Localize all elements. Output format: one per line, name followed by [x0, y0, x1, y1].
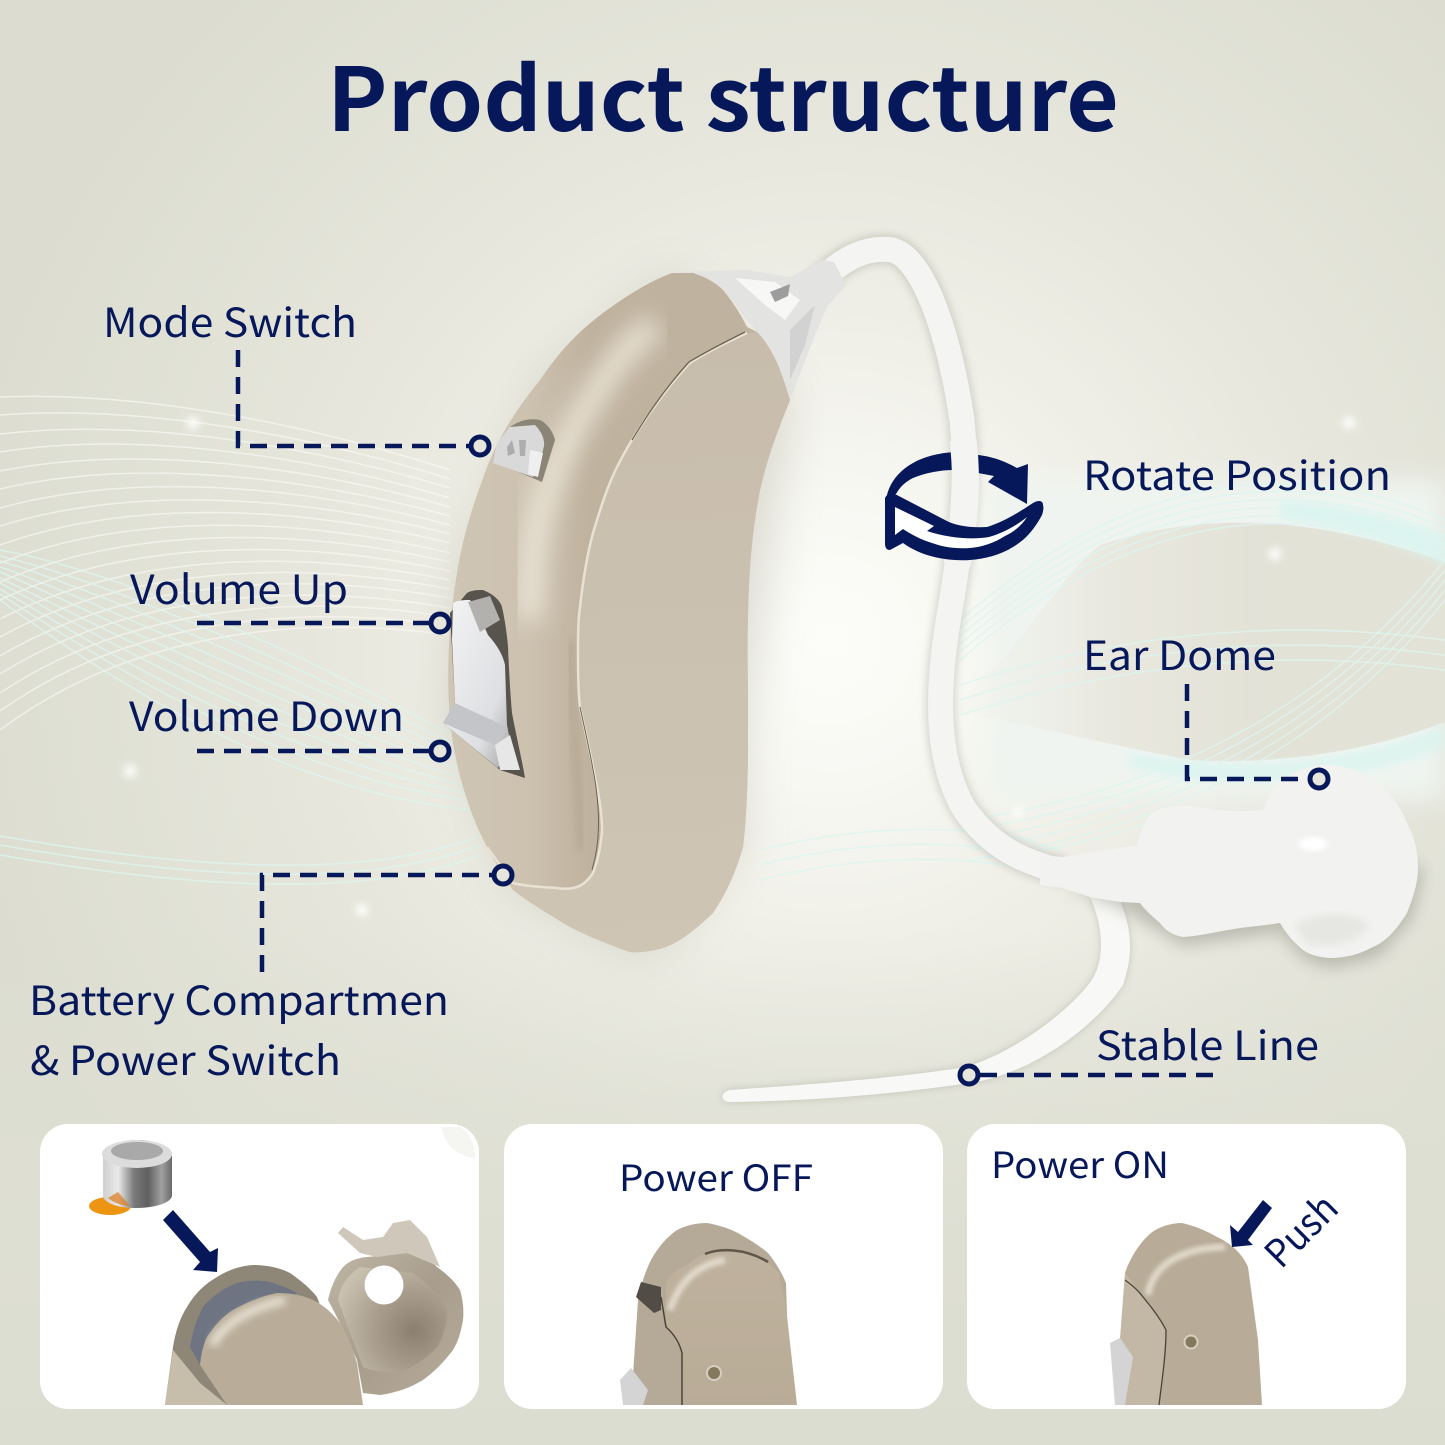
label: battery compartment and power switch	[29, 969, 449, 1087]
hearing aid tube	[820, 249, 1065, 872]
wave lines left	[0, 396, 480, 884]
leader: stable line	[960, 1066, 1213, 1084]
main hearing aid body	[443, 260, 846, 952]
tube through ring	[957, 440, 965, 565]
label: power on: Power ON	[991, 1137, 1169, 1189]
rotate position icon	[885, 440, 1043, 565]
sparkles	[124, 417, 1355, 916]
hearing aid front	[165, 1265, 363, 1405]
leader: battery compartment	[262, 866, 512, 972]
soft shadow	[447, 273, 790, 952]
ear dome	[1040, 765, 1423, 968]
arrow: insert battery	[163, 1210, 218, 1272]
volume rocker	[443, 590, 525, 778]
leader: volume down	[197, 742, 449, 760]
panel: power off	[504, 1124, 943, 1409]
label: rotate position: Rotate Position	[1083, 444, 1391, 502]
leader: mode switch	[238, 350, 489, 455]
leader: volume up	[197, 614, 449, 632]
panel: power on	[967, 1124, 1406, 1409]
label: volume up: Volume Up	[130, 558, 348, 616]
leader: ear dome	[1187, 684, 1328, 788]
label: ear dome: Ear Dome	[1083, 624, 1276, 682]
label: mode switch: Mode Switch	[103, 291, 357, 349]
open battery door	[328, 1220, 463, 1395]
arrow: push	[1230, 1200, 1272, 1247]
panel: battery install	[40, 1124, 479, 1409]
title: Product structure	[327, 30, 1119, 157]
label: power off: Power OFF	[619, 1150, 813, 1202]
label: battery compartment and power switch: Battery Compartmen	[29, 969, 449, 1027]
front panel	[513, 332, 790, 952]
label: push: Push	[1250, 1179, 1348, 1278]
clear tube connector	[680, 260, 846, 400]
device shell	[448, 273, 790, 952]
wave lines right	[760, 484, 1445, 880]
label: battery compartment and power switch: & Power Switch	[30, 1029, 341, 1087]
label: stable line: Stable Line	[1096, 1014, 1319, 1072]
hearing aid power on	[1110, 1223, 1262, 1405]
hearing aid power off	[620, 1223, 797, 1405]
highlight	[530, 325, 655, 620]
icon: battery	[89, 1140, 172, 1215]
mode switch	[493, 419, 555, 482]
label: volume down: Volume Down	[129, 685, 404, 743]
seam	[487, 333, 747, 889]
stable line	[722, 897, 1130, 1102]
